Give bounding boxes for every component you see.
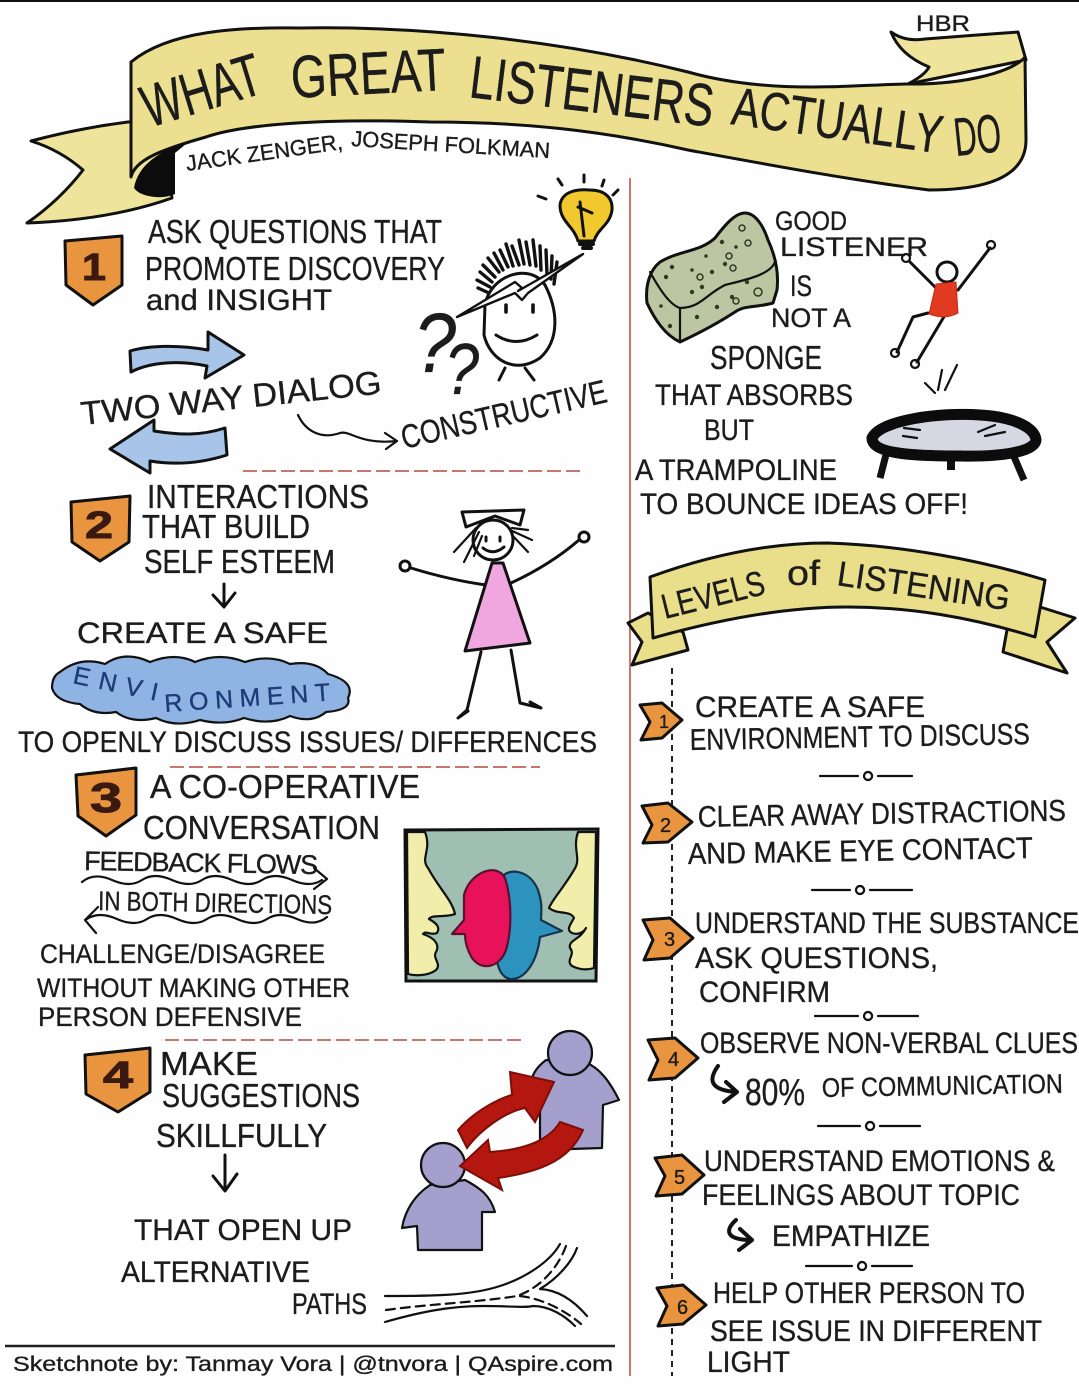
icon: cloud: ENVI (71, 661, 161, 707)
icon: jumping figure (891, 241, 995, 393)
text: challenge: CHALLENGE/DISAGREE (40, 939, 325, 969)
icon: lightbulb (538, 175, 618, 248)
title text: DO (951, 103, 1004, 168)
divider (818, 1122, 920, 1130)
level 5: FEELINGS ABOUT TOPIC (702, 1179, 1020, 1212)
badge 2 (71, 496, 130, 561)
authors: JACK ZENGER, (184, 129, 344, 176)
title text: WHAT (133, 41, 269, 140)
text: good listener: THAT ABSORBS (655, 379, 853, 412)
title text: LISTENERS (466, 43, 718, 140)
badge 1: 1 (82, 247, 106, 289)
panel: sponge and trampoline (635, 206, 1036, 521)
heading 3 (143, 768, 420, 846)
section 2: self esteem (18, 478, 597, 759)
level 2 (642, 795, 1066, 871)
heading 2 (142, 478, 369, 580)
level 3: 3 (664, 929, 675, 951)
level 4: 80% (745, 1072, 805, 1114)
heading 1: PROMOTE DISCOVERY (145, 250, 445, 287)
level 2: 2 (660, 815, 671, 837)
source HBR: HBR (916, 11, 970, 36)
icon: girl (400, 510, 589, 718)
title text: ACTUALLY (728, 76, 947, 165)
level 6: LIGHT (707, 1346, 790, 1379)
banner fold (134, 144, 186, 197)
icon: cloud (52, 656, 350, 724)
level 5: EMPATHIZE (772, 1220, 930, 1253)
heading 3: CONVERSATION (143, 809, 380, 846)
icon: thinking head: ? (445, 330, 479, 410)
banner tails (27, 32, 1026, 223)
banner body (131, 28, 1026, 190)
levels banner: LISTENING (835, 554, 1013, 618)
text: good listener: NOT A (771, 303, 851, 333)
divider (812, 886, 912, 894)
level 6 (657, 1277, 1042, 1379)
icon: thinking head: ? (414, 296, 456, 390)
text: open up paths: PATHS (292, 1288, 367, 1321)
level 1 (640, 691, 1030, 757)
arrow: to constructive (298, 415, 397, 449)
label: constructive: CONSTRUCTIVE (397, 373, 610, 456)
heading 2: SELF ESTEEM (144, 543, 335, 580)
level 1: 1 (659, 712, 669, 732)
icon: trampoline (872, 414, 1036, 480)
level 3 (643, 907, 1079, 1009)
divider (806, 1262, 912, 1270)
badge 1 (65, 236, 122, 305)
level 1: CREATE A SAFE (695, 691, 925, 724)
heading 1: and INSIGHT (146, 284, 332, 317)
icon: sponge (647, 213, 778, 342)
icon: people exchanging ideas (402, 1031, 619, 1250)
title banner: JOSEPH FOLKMAN (351, 126, 551, 163)
level 4 (648, 1027, 1078, 1114)
badge 2: 2 (85, 505, 113, 547)
icon: two faces with speech bubbles (405, 829, 598, 981)
level 2: AND MAKE EYE CONTACT (688, 832, 1033, 871)
level 6: SEE ISSUE IN DIFFERENT (710, 1315, 1042, 1348)
levels banner (628, 543, 1075, 673)
text: challenge: PERSON DEFENSIVE (38, 1002, 302, 1032)
heading 4: SUGGESTIONS (162, 1077, 360, 1114)
badge 3 (76, 768, 136, 836)
heading 3: A CO-OPERATIVE (150, 768, 420, 805)
badge 3: 3 (90, 774, 122, 821)
divider (815, 1012, 918, 1020)
section 3: cooperative conversation (37, 768, 598, 1032)
section 1: ask questions (65, 175, 618, 473)
heading 4: SKILLFULLY (156, 1117, 327, 1154)
level 4: 4 (668, 1049, 679, 1071)
text: open up paths: THAT OPEN UP (134, 1214, 352, 1247)
text: good listener: LISTENER (780, 232, 928, 262)
heading 4 (156, 1045, 360, 1154)
text: good listener: TO BOUNCE IDEAS OFF! (640, 488, 968, 521)
text: create a safe: CREATE A SAFE (77, 617, 328, 650)
footer credit: Sketchnote by: Tanmay Vora | @tnvora | QAspire.com (13, 1353, 613, 1376)
divider (820, 772, 912, 780)
feedback flows: FEEDBACK FLOWS (84, 846, 318, 880)
text: good listener (635, 206, 968, 521)
heading 1 (145, 213, 445, 317)
heading 1: ASK QUESTIONS THAT (148, 213, 442, 250)
arrow: two way top (130, 332, 244, 378)
level 6: 6 (677, 1297, 688, 1319)
text: challenge: WITHOUT MAKING OTHER (37, 973, 350, 1003)
text: challenge (37, 939, 350, 1032)
icon: thinking head (414, 240, 583, 410)
feedback flows: IN BOTH DIRECTIONS (98, 886, 332, 920)
heading 4: MAKE (160, 1045, 258, 1082)
feedback flows (82, 846, 332, 933)
levels banner: LEVELS (658, 564, 769, 627)
text: good listener: SPONGE (710, 339, 822, 376)
heading 2: INTERACTIONS (147, 478, 369, 515)
text: discuss: TO OPENLY DISCUSS ISSUES/ DIFFERENCES (18, 726, 597, 759)
arrow: down (213, 1155, 237, 1191)
level 5 (655, 1145, 1055, 1253)
level 6: HELP OTHER PERSON TO (713, 1277, 1025, 1310)
text: open up paths (121, 1214, 367, 1321)
title banner (27, 11, 1026, 223)
badge 4: 4 (103, 1055, 133, 1097)
text: good listener: IS (790, 270, 812, 303)
arrow: down (213, 584, 235, 607)
heading 2: THAT BUILD (142, 508, 310, 545)
section 4: make suggestions (85, 1031, 619, 1326)
text: open up paths: ALTERNATIVE (121, 1256, 310, 1289)
badge 4 (85, 1048, 150, 1112)
panel: levels of listening (628, 543, 1079, 1379)
icon: road fork (385, 1244, 587, 1326)
label: two way dialog: TWO WAY DIALOG (79, 364, 383, 432)
text: good listener: GOOD (775, 206, 847, 236)
title text: GREAT (289, 36, 447, 111)
arrow: two way bottom (110, 420, 227, 473)
level 3: ASK QUESTIONS, (695, 942, 938, 975)
icon: cloud: RONMENT (163, 678, 331, 718)
title text (133, 36, 1004, 168)
levels banner: of (787, 554, 820, 593)
text: good listener: BUT (704, 414, 754, 447)
level 3: CONFIRM (699, 976, 830, 1009)
text: good listener: A TRAMPOLINE (635, 454, 837, 487)
level 5: 5 (674, 1167, 685, 1189)
